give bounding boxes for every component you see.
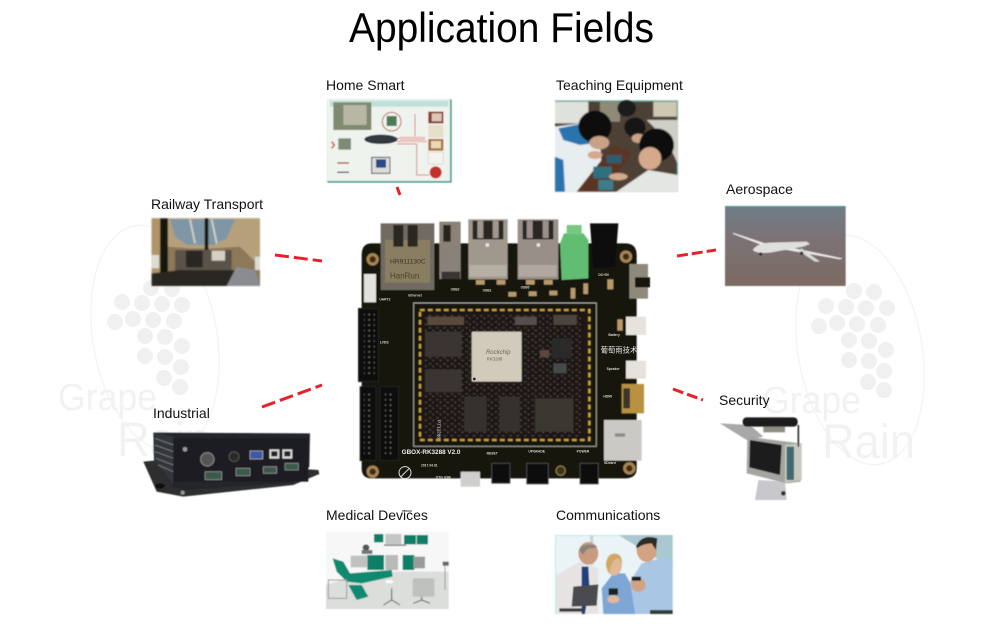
no-lead symbol [399, 467, 411, 479]
board silk-screen labels: GBOX-RK3288 V2.0 [402, 449, 461, 456]
connector: SD card slot [604, 420, 642, 461]
board silk-screen labels: LVDS [380, 340, 389, 344]
panel: Communications [555, 507, 673, 614]
buttons and OTG USB [461, 463, 598, 487]
PCB base [362, 243, 637, 478]
panel: Security [719, 392, 802, 500]
arrow: dashed link to Railway Transport [275, 255, 322, 261]
board silk-screen labels: Battery [608, 333, 620, 337]
small components [476, 279, 623, 331]
watermark: right Grape Rain logo: Grape [762, 380, 861, 422]
mounting holes [368, 252, 634, 476]
image: dental treatment unit [326, 532, 449, 609]
image: business people with devices [555, 535, 673, 614]
board silk-screen labels: Speaker [607, 367, 620, 371]
board silk-screen labels: UART2 [379, 298, 391, 302]
label: Teaching Equipment: Teaching Equipment [556, 77, 683, 93]
board silk-screen labels: 2017.04.01 [421, 464, 438, 468]
board silk-screen labels: POWER [577, 449, 590, 453]
connector: slide switch [629, 264, 650, 299]
image: industrial box computer [143, 433, 319, 497]
label: Industrial: Industrial [153, 405, 210, 421]
board silk-screen labels: USB2 [451, 288, 460, 292]
board silk-screen labels: USB1 [483, 289, 492, 293]
panel: GBOX-RK3288 development board [358, 219, 650, 487]
connector: HDMI [622, 384, 644, 413]
panel: Industrial [143, 405, 319, 497]
board silk-screen labels: HDMI [603, 394, 612, 398]
arrow: dashed link to Home Smart [397, 187, 400, 195]
board silk-screen labels: UPGRADE [528, 449, 546, 453]
connector: Ethernet jack [381, 223, 434, 290]
board silk-screen labels: PT13288 [436, 420, 441, 439]
watermark: left Grape Rain logo [58, 215, 236, 467]
panel: Railway Transport [151, 196, 263, 286]
connector: battery socket [626, 317, 646, 335]
connector: USB1 [468, 219, 508, 279]
arrow: dashed link to Security [673, 389, 703, 400]
board silk-screen labels: USB0 [521, 285, 530, 289]
connector: USB0 [518, 219, 558, 279]
board silk-screen labels [379, 273, 638, 479]
Ethernet jack markings: HanRun [390, 271, 419, 280]
board silk-screen labels: SDcard [604, 461, 616, 465]
SoC markings: RK3288 [487, 357, 503, 362]
connector: speaker socket [626, 361, 646, 379]
image: train cabin interior [152, 218, 260, 286]
arrow: dashed link to Aerospace [677, 250, 716, 256]
image: students at workbench [555, 100, 678, 192]
board silk-screen labels: 葡萄雨技术 [601, 345, 638, 354]
label: Communications: Communications [556, 507, 660, 523]
Ethernet jack markings: HR911130C [390, 258, 426, 265]
title: Application Fields [349, 4, 654, 51]
watermark: left Grape Rain logo: Rain [117, 414, 210, 467]
label: Railway Transport: Railway Transport [151, 196, 263, 212]
board silk-screen labels: RESET [487, 451, 498, 455]
SoC markings [473, 350, 511, 380]
board silk-screen labels: Ethernet [408, 293, 423, 297]
arrow: dashed link to Industrial [262, 385, 322, 407]
panel: Home Smart [326, 77, 452, 183]
connector: green audio terminal [560, 225, 588, 280]
connector: UART2 [364, 274, 376, 302]
panel: Aerospace [725, 181, 846, 286]
image: drone in flight [725, 206, 846, 286]
watermark: right Grape Rain logo [762, 225, 941, 475]
panel: Medical Devices [326, 507, 449, 609]
Ethernet jack markings [390, 258, 426, 280]
label: Security: Security [719, 392, 770, 408]
connector: DC power jack [590, 223, 618, 268]
board silk-screen labels: DC+5V [598, 273, 610, 277]
module: core board [414, 303, 596, 446]
label: Home Smart: Home Smart [326, 77, 405, 93]
label: Medical Devices: Medical Devices [326, 507, 428, 523]
watermark: left Grape Rain logo: Grape [58, 377, 157, 419]
connector: USB2 [439, 222, 461, 279]
watermark: right Grape Rain logo: Rain [822, 416, 915, 469]
connector: left headers [358, 308, 398, 461]
panel: Teaching Equipment [555, 77, 683, 192]
SoC markings: Rockchip [486, 350, 511, 356]
mark over label [402, 510, 412, 512]
label: Aerospace: Aerospace [726, 181, 793, 197]
image: smart home diagram [327, 99, 452, 183]
board silk-screen labels: OTG USB [436, 475, 451, 479]
image: surveillance camera unit [720, 417, 802, 500]
